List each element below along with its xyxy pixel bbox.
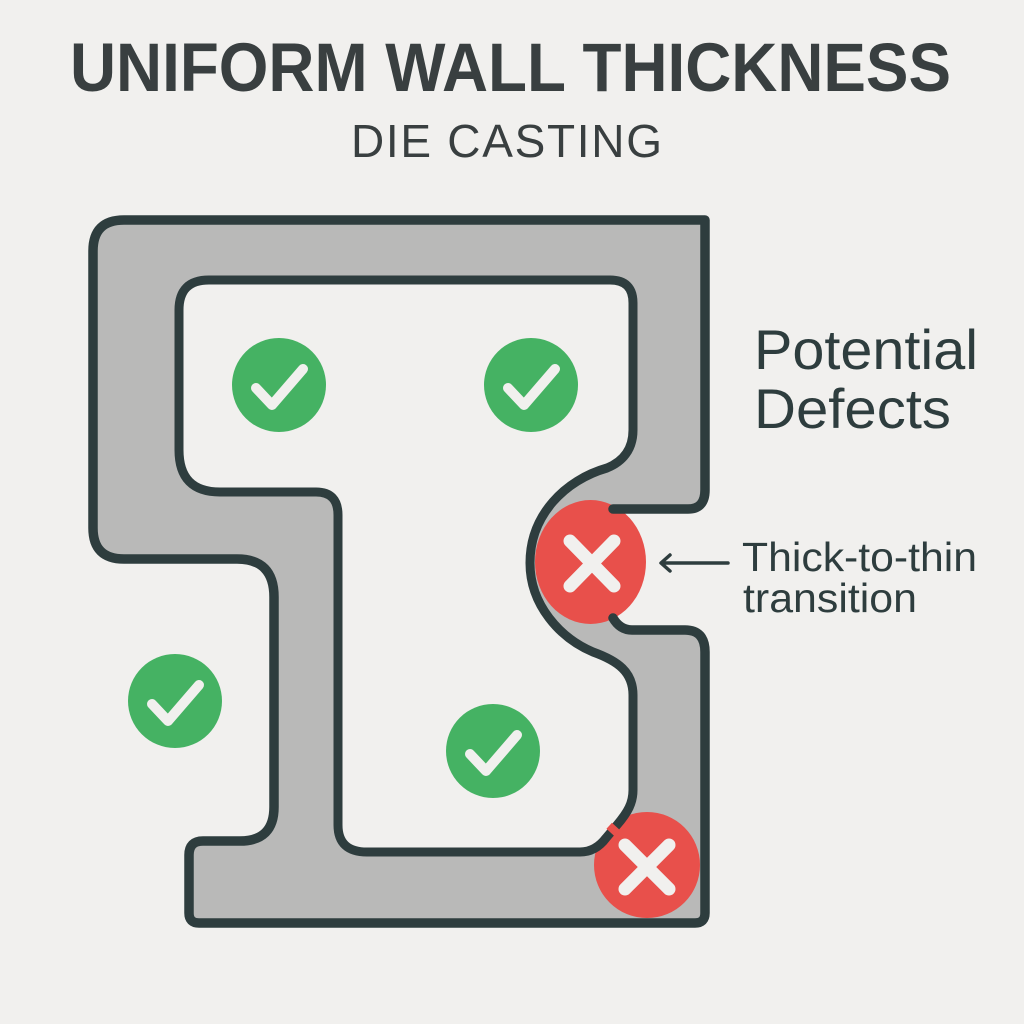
title: UNIFORM WALL THICKNESS bbox=[70, 29, 951, 106]
heading: potential defects: Defects bbox=[754, 377, 951, 440]
casting cross-section bbox=[93, 220, 705, 923]
icon: cross mark at corner bbox=[625, 845, 669, 889]
icon: cross mark at transition bbox=[570, 541, 614, 586]
callout label: Thick-to-thin bbox=[742, 534, 977, 580]
inner cavity fill bbox=[179, 280, 633, 852]
heading: potential defects bbox=[754, 318, 978, 440]
icon: check top right bbox=[484, 338, 578, 432]
subtitle: DIE CASTING bbox=[351, 115, 662, 167]
icon: check bottom bbox=[446, 704, 540, 798]
inner cavity outline bbox=[179, 280, 633, 852]
outer wall outline bbox=[93, 220, 705, 923]
arrow bbox=[661, 555, 728, 571]
icon: defect cross at corner, disc bbox=[594, 812, 700, 918]
icon: check left bbox=[128, 654, 222, 748]
callout label: transition bbox=[743, 575, 917, 621]
icon: check top left bbox=[232, 338, 326, 432]
red break in cavity outline bbox=[610, 826, 616, 832]
callout label bbox=[742, 534, 977, 621]
icon: defect cross at transition, disc bbox=[535, 500, 646, 624]
casting grey body bbox=[93, 220, 705, 923]
heading: potential defects: Potential bbox=[754, 318, 978, 381]
